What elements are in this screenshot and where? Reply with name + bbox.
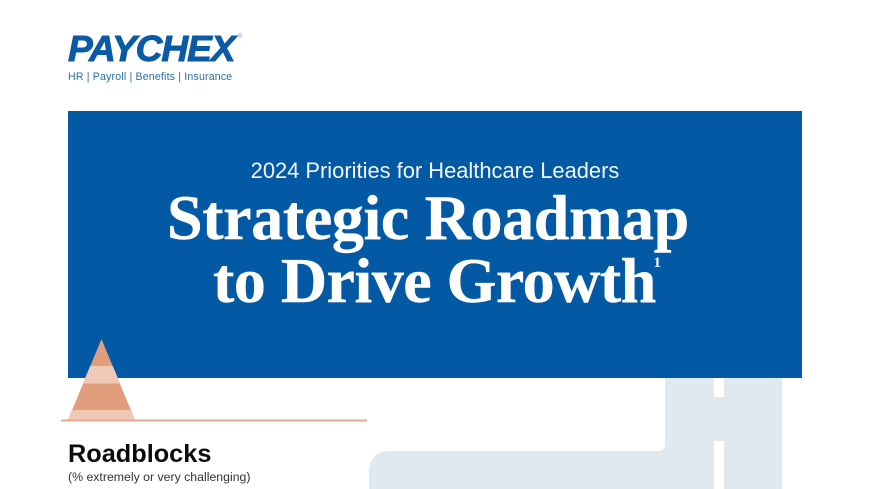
main title line 1: Strategic Roadmap xyxy=(167,182,689,253)
footnote marker: 1 xyxy=(654,255,661,271)
logo: Paychex xyxy=(68,28,242,83)
logo tagline: HR | Payroll | Benefits | Insurance xyxy=(68,71,232,83)
subtitle: 2024 Priorities for Healthcare Leaders xyxy=(251,158,619,183)
registered mark: ® xyxy=(238,34,242,40)
section subheading: (% extremely or very challenging) xyxy=(68,470,250,484)
main title line 2: to Drive Growth xyxy=(213,245,656,316)
section heading: Roadblocks: Roadblocks xyxy=(68,440,211,468)
logo wordmark: PAYCHEX xyxy=(68,28,235,69)
icon: traffic cone xyxy=(61,339,367,422)
title banner xyxy=(68,111,802,378)
